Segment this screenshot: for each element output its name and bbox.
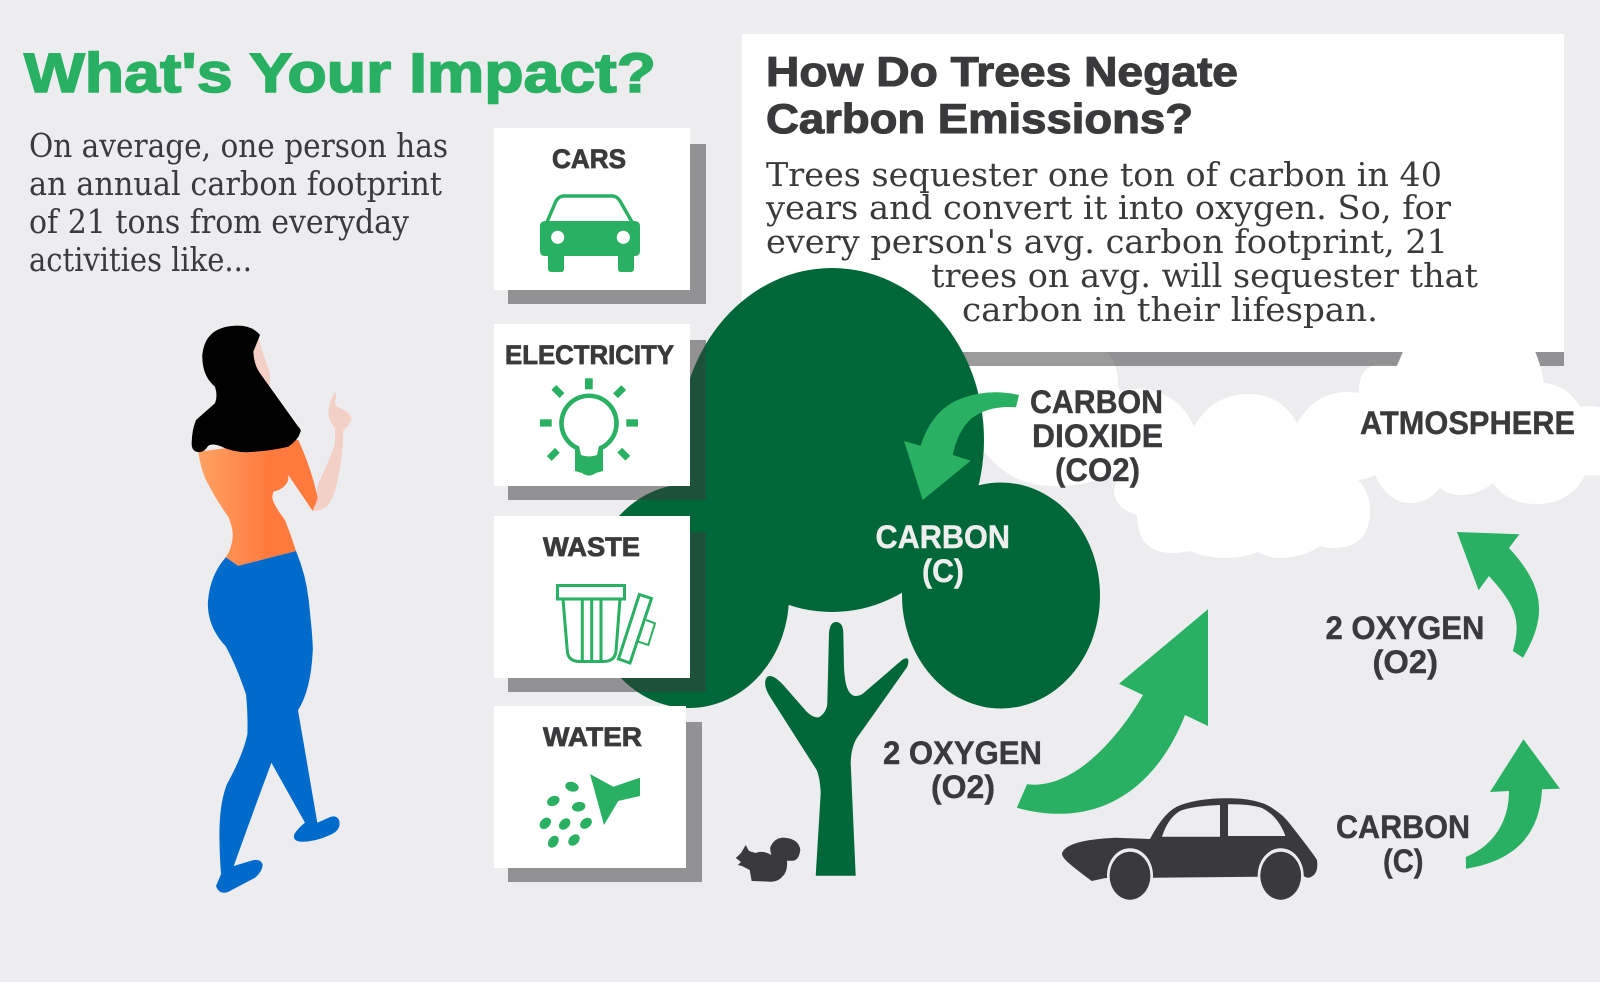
tree crown: top	[680, 268, 984, 612]
panel body text: carbon in their lifespan.	[962, 291, 1378, 329]
info panel	[742, 34, 1564, 352]
card: electricity	[494, 324, 690, 486]
panel heading: How Do Trees Negate	[766, 48, 1238, 95]
tree crown: right	[902, 482, 1100, 708]
info panel shadow	[756, 352, 1564, 366]
panel heading: Carbon Emissions?	[766, 95, 1193, 142]
card: waste	[494, 516, 690, 678]
label: carbon by car: (C)	[1383, 843, 1424, 879]
card shadow: waste	[508, 532, 706, 692]
woman: leggings	[208, 551, 340, 893]
label: carbon dioxide	[1030, 384, 1163, 488]
intro text block: activities like...	[29, 241, 252, 279]
panel body text: Trees sequester one ton of carbon in 40	[766, 156, 1442, 194]
tree crown: left	[589, 484, 789, 708]
label: carbon dioxide: (CO2)	[1055, 452, 1140, 488]
label: water: WATER	[543, 722, 642, 752]
card shadow: water	[508, 722, 702, 882]
label: oxygen by tree: 2 OXYGEN	[883, 735, 1042, 771]
intro text block: an annual carbon footprint	[29, 165, 442, 203]
label: carbon dioxide: CARBON	[1030, 384, 1163, 420]
icon: shower spray	[537, 774, 640, 850]
tree trunk	[765, 622, 908, 876]
arrow: carbon from car	[1466, 739, 1560, 869]
woman: shirt	[198, 440, 318, 566]
car: wheels	[1110, 852, 1301, 900]
intro text block: On average, one person has	[29, 127, 448, 165]
panel body text: trees on avg. will sequester that	[931, 257, 1478, 295]
panel body text: years and convert it into oxygen. So, for	[765, 189, 1451, 227]
card: cars	[494, 128, 690, 290]
label: oxygen by atmosphere: (O2)	[1372, 644, 1438, 680]
panel body text	[765, 156, 1478, 329]
icon: trash can	[558, 586, 655, 663]
icon: light bulb	[540, 378, 638, 476]
label: oxygen by tree: (O2)	[931, 769, 995, 805]
label: oxygen by tree	[883, 735, 1042, 805]
label: cars: CARS	[552, 144, 626, 174]
label: atmosphere: ATMOSPHERE	[1360, 405, 1575, 441]
cloud top overlapping the panel shadow	[1396, 340, 1544, 402]
label: carbon in tree: CARBON	[876, 519, 1010, 555]
car: wheel arches	[1107, 848, 1153, 903]
car: windows	[1162, 804, 1285, 837]
background cloud	[960, 340, 1600, 558]
label: carbon in tree: (C)	[922, 553, 964, 589]
label: carbon dioxide: DIOXIDE	[1032, 418, 1163, 454]
arrow: oxygen to atmosphere	[1457, 532, 1539, 658]
woman: face	[250, 335, 270, 400]
intro text block: of 21 tons from everyday	[29, 203, 410, 241]
icon: car silhouette	[1062, 798, 1317, 903]
label: carbon by car	[1336, 809, 1470, 879]
arrow: CO2 into tree	[904, 392, 1019, 500]
panel heading	[766, 48, 1238, 142]
label: carbon by car: CARBON	[1336, 809, 1470, 845]
card shadow: electricity	[508, 340, 706, 500]
label: oxygen by atmosphere	[1326, 610, 1484, 680]
label: waste: WASTE	[543, 532, 640, 562]
icon: squirrel	[736, 838, 800, 882]
icon: car	[540, 196, 640, 272]
card: water	[494, 706, 686, 868]
label: oxygen by atmosphere: 2 OXYGEN	[1326, 610, 1484, 646]
tree	[589, 268, 1100, 876]
arrow: oxygen from tree	[1017, 609, 1208, 814]
car: far wheel arch	[1258, 848, 1304, 903]
card shadow: cars	[508, 144, 706, 304]
panel body text: every person's avg. carbon footprint, 21	[766, 223, 1448, 261]
woman: arm and hand	[313, 392, 352, 511]
title: What's Your Impact?	[24, 41, 656, 104]
illustration: woman pointing	[192, 326, 352, 893]
label: electricity: ELECTRICITY	[505, 340, 674, 370]
intro text block	[29, 127, 448, 279]
woman: hair	[192, 326, 301, 452]
label: carbon in tree	[876, 519, 1010, 589]
